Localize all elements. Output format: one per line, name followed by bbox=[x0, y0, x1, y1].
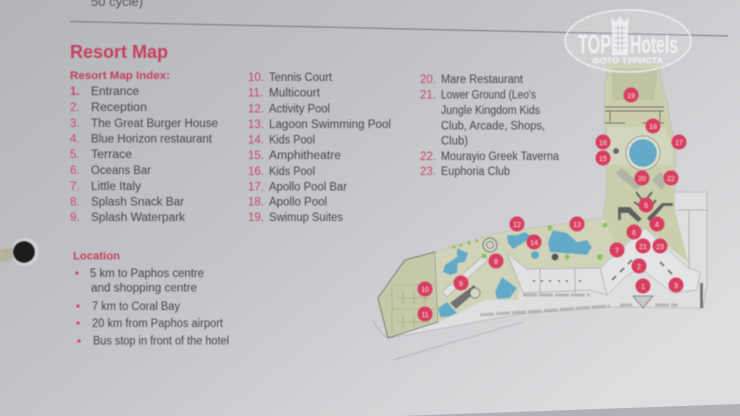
map number markers: 1 bbox=[641, 284, 645, 291]
index column 2: 16. bbox=[248, 166, 264, 178]
index column 2: Tennis Court bbox=[269, 72, 333, 84]
map number markers: 7 bbox=[615, 248, 619, 255]
index column 1: 4. bbox=[70, 134, 80, 146]
index column 1: The Great Burger House bbox=[91, 118, 218, 130]
index column 1: 2. bbox=[70, 102, 80, 114]
map number markers: 4 bbox=[655, 222, 659, 229]
tennis and multicourt plot bbox=[378, 252, 438, 338]
resort map bbox=[373, 63, 707, 360]
swim-up suites bbox=[605, 107, 664, 123]
index column 2: Amphitheatre bbox=[269, 150, 341, 162]
index column 3: 22. bbox=[420, 151, 436, 163]
index column 2: Apollo Pool bbox=[269, 196, 327, 208]
map number markers: 20 bbox=[638, 176, 646, 183]
index column 1: 5. bbox=[70, 149, 80, 161]
index column 3: Club) bbox=[441, 136, 468, 148]
index column 1: Blue Horizon restaurant bbox=[91, 134, 213, 146]
terrace stripes bbox=[480, 295, 678, 315]
index column 1 bbox=[70, 70, 218, 224]
map number markers: 3 bbox=[674, 283, 678, 290]
index column 1: Splash Snack Bar bbox=[91, 196, 184, 208]
index column 2: Multicourt bbox=[269, 88, 321, 100]
map number markers: 14 bbox=[530, 240, 538, 247]
index column 2: Swimup Suites bbox=[269, 212, 343, 224]
index column 2: 19. bbox=[248, 212, 264, 224]
slides bbox=[442, 256, 488, 297]
index column 2: 14. bbox=[248, 134, 264, 146]
map number markers: 22 bbox=[667, 176, 675, 183]
index column 1: 8. bbox=[70, 196, 80, 208]
index column 2: 12. bbox=[248, 104, 264, 116]
index column 1: Terrace bbox=[91, 149, 132, 161]
index column 2: 10. bbox=[248, 72, 264, 84]
pools bbox=[443, 248, 468, 275]
dark wing roofs bbox=[618, 207, 642, 222]
plants bbox=[452, 222, 608, 260]
index column 2: 13. bbox=[248, 119, 264, 131]
index column 2: 17. bbox=[248, 182, 264, 194]
road edge bbox=[373, 320, 523, 360]
map number markers: 10 bbox=[421, 287, 429, 294]
location list: Bus stop in front of the hotel bbox=[93, 336, 229, 348]
room markers bbox=[533, 260, 672, 281]
gardens west wing bbox=[435, 218, 618, 322]
index column 3 bbox=[420, 74, 560, 178]
map number markers bbox=[418, 88, 686, 322]
index column 3: Mare Restaurant bbox=[441, 74, 524, 86]
watermark logo: TOP bbox=[578, 29, 611, 59]
map number markers: 5 bbox=[644, 203, 648, 210]
index column 3: Euphoria Club bbox=[441, 166, 510, 178]
map number markers: 9 bbox=[459, 281, 463, 288]
map number markers: 15 bbox=[599, 156, 607, 163]
main building arms bbox=[600, 228, 700, 295]
index column 2: 11. bbox=[248, 88, 263, 100]
map number markers: 16 bbox=[599, 140, 607, 147]
binder hole bbox=[0, 238, 39, 266]
index column 1: Splash Waterpark bbox=[91, 212, 185, 224]
watermark logo bbox=[565, 10, 691, 72]
index column 3: Mourayio Greek Taverna bbox=[441, 151, 560, 163]
map number markers: 17 bbox=[675, 140, 683, 147]
index column 1: Resort Map Index: bbox=[70, 70, 170, 82]
index column 1: 3. bbox=[70, 118, 80, 130]
index column 1: 6. bbox=[70, 165, 80, 177]
map number markers: 13 bbox=[573, 222, 581, 229]
index column 1: Little Italy bbox=[91, 181, 141, 193]
index column 2: Kids Pool bbox=[269, 134, 315, 146]
index column 2: Activity Pool bbox=[269, 104, 330, 116]
index column 3: Jungle Kingdom Kids bbox=[441, 105, 540, 117]
map number markers: 19 bbox=[627, 93, 635, 100]
index column 2 bbox=[248, 72, 391, 224]
west wing walls bbox=[540, 210, 707, 292]
site footprint bbox=[378, 63, 707, 338]
index column 2: Apollo Pool Bar bbox=[269, 182, 347, 194]
watermark logo: Hotels bbox=[630, 31, 678, 59]
index column 3: 23. bbox=[420, 166, 436, 178]
index column 1: Oceans Bar bbox=[91, 165, 151, 177]
index column 1: Entrance bbox=[91, 86, 139, 98]
index column 2: 18. bbox=[248, 196, 264, 208]
location list: 5 km to Paphos centre bbox=[90, 268, 204, 280]
map number markers: 11 bbox=[421, 312, 429, 319]
map number markers: 12 bbox=[513, 222, 521, 229]
index column 3: Lower Ground (Leo's bbox=[441, 90, 536, 102]
title: Resort Map bbox=[70, 41, 168, 62]
index column 3: 21. bbox=[420, 90, 436, 102]
porte cochere bbox=[633, 296, 653, 308]
location list: 20 km from Paphos airport bbox=[92, 318, 224, 330]
watermark logo: ФОТО ТУРИСТА bbox=[592, 56, 663, 66]
map number markers: 8 bbox=[494, 259, 498, 266]
index column 1: 9. bbox=[70, 212, 80, 224]
index column 3: 20. bbox=[420, 74, 436, 86]
index column 2: Lagoon Swimming Pool bbox=[269, 119, 391, 131]
location list: Location bbox=[73, 250, 120, 262]
map number markers: 18 bbox=[649, 124, 657, 131]
location list bbox=[73, 250, 229, 348]
location list: 7 km to Coral Bay bbox=[92, 301, 180, 313]
index column 1: Reception bbox=[91, 102, 147, 114]
map number markers: 2 bbox=[637, 264, 641, 271]
gardens east wing bbox=[603, 63, 688, 262]
index column 3: Club, Arcade, Shops, bbox=[441, 120, 545, 132]
index column 2: Kids Pool bbox=[269, 166, 315, 178]
map number markers: 23 bbox=[656, 244, 664, 251]
location list: and shopping centre bbox=[91, 282, 197, 294]
terrace shapes bbox=[615, 168, 642, 190]
map number markers: 6 bbox=[632, 230, 636, 237]
index column 1: 7. bbox=[70, 181, 80, 193]
index column 2: 15. bbox=[248, 150, 264, 162]
index column 1: 1. bbox=[70, 86, 80, 98]
map number markers: 21 bbox=[639, 244, 647, 251]
